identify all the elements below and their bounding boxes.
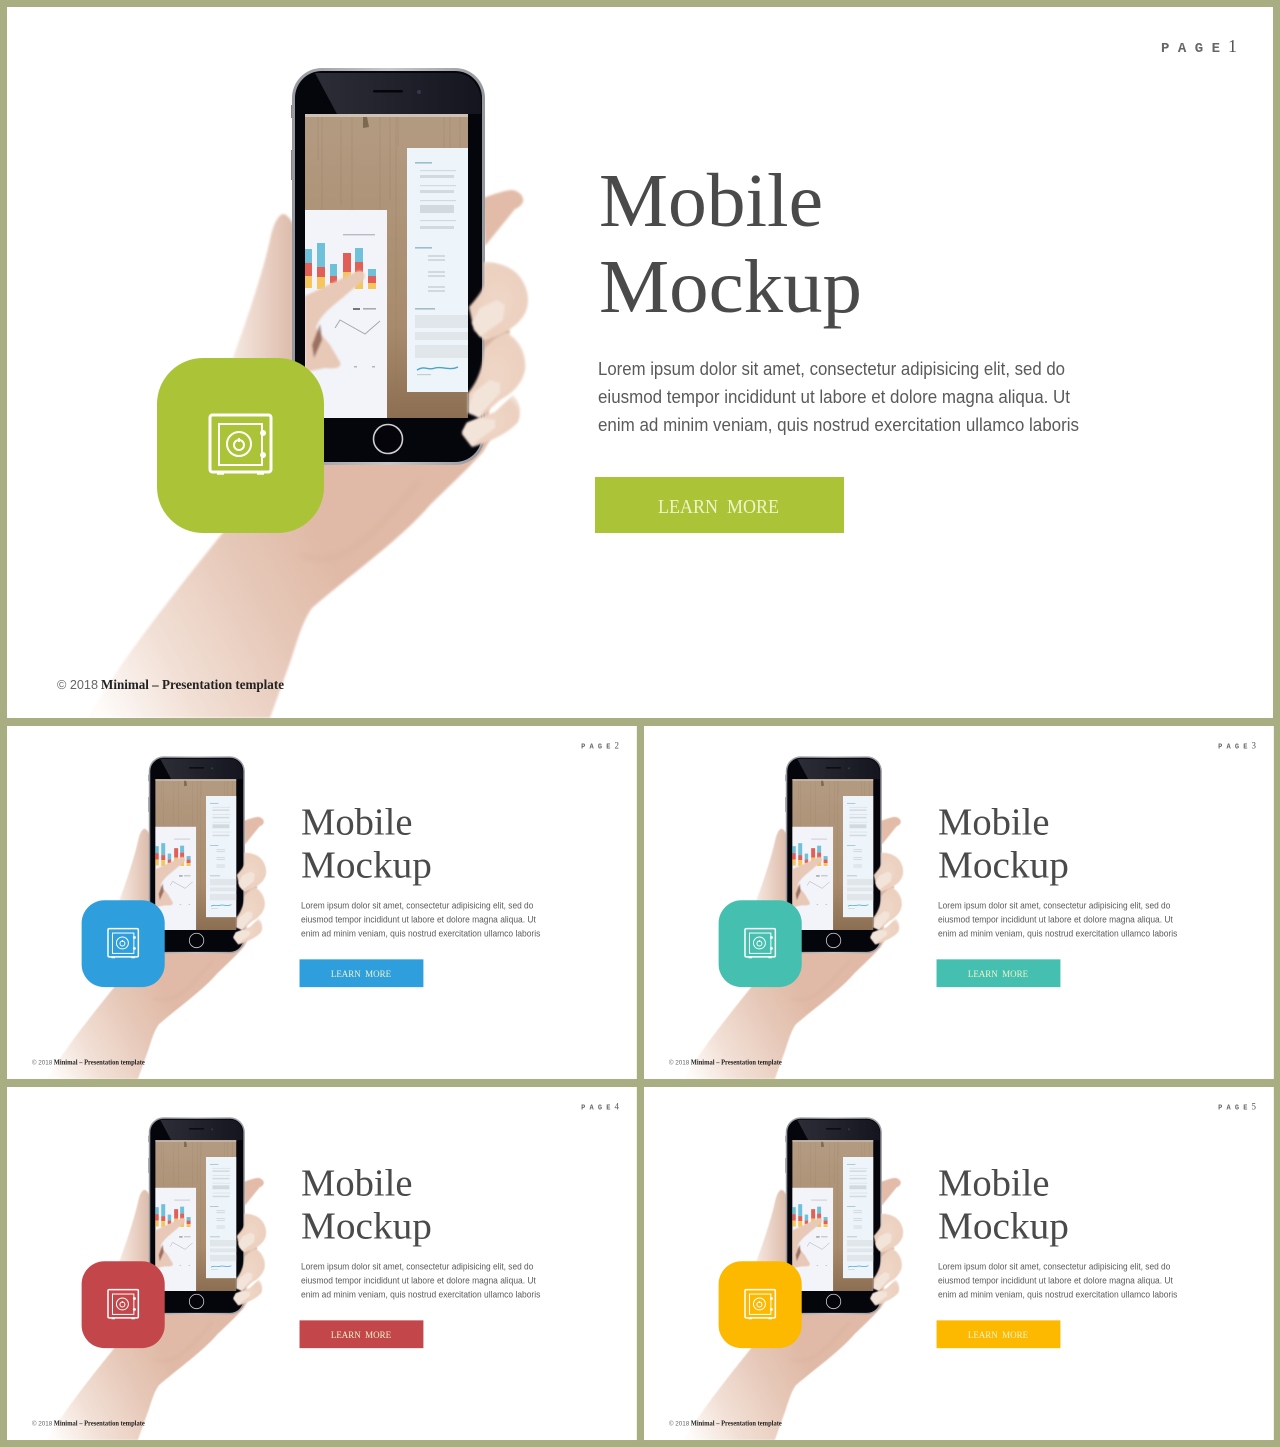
button: [937, 1320, 1060, 1348]
footer: Minimal – Presentation template: [54, 1059, 145, 1067]
footer: © 2018: [32, 1059, 53, 1067]
icon: safe: [108, 929, 138, 957]
speaker and camera: [373, 90, 421, 94]
heading: Mobile: [599, 159, 823, 243]
page number: PAGE: [581, 1104, 610, 1112]
page number: [1218, 740, 1256, 751]
heading: Mockup: [938, 1205, 1069, 1247]
button: [300, 1320, 423, 1348]
phone screen: [305, 114, 468, 418]
heading: Mockup: [301, 844, 432, 886]
paper: chart: [305, 210, 387, 418]
icon tile: teal: [719, 900, 802, 987]
heading: Mobile: [938, 802, 1049, 844]
body text: enim ad minim veniam, quis nostrud exercitation ullamco laboris: [598, 415, 1079, 435]
body text: enim ad minim veniam, quis nostrud exercitation ullamco laboris: [938, 1290, 1178, 1300]
footer: Minimal – Presentation template: [101, 678, 284, 693]
illustration: hand holding phone: [47, 1117, 266, 1440]
page number: 5: [1251, 1101, 1256, 1111]
footer: Minimal – Presentation template: [691, 1420, 782, 1428]
page number: 4: [614, 1101, 619, 1111]
heading: Mobile: [301, 802, 412, 844]
button: LEARN MORE: [658, 496, 779, 518]
page number: PAGE: [1218, 1104, 1247, 1112]
pointing finger on screen: [305, 271, 365, 372]
button: LEARN MORE: [331, 1330, 391, 1341]
footer: © 2018: [669, 1059, 690, 1067]
body text: eiusmod tempor incididunt ut labore et dolore magna aliqua. Ut: [938, 1276, 1173, 1286]
heading: [938, 802, 1069, 886]
body text: [301, 901, 541, 939]
finger nails: [462, 300, 505, 445]
panel: slide 1 (green): [7, 7, 1273, 718]
footer: © 2018: [669, 1420, 690, 1428]
body text: Lorem ipsum dolor sit amet, consectetur adipisicing elit, sed do: [301, 1262, 533, 1272]
footer: Minimal – Presentation template: [691, 1059, 782, 1067]
page number: [581, 740, 619, 751]
phone: [291, 68, 485, 465]
heading: [599, 159, 862, 329]
body text: eiusmod tempor incididunt ut labore et dolore magna aliqua. Ut: [598, 387, 1070, 407]
page number: 2: [614, 740, 619, 750]
heading: Mobile: [301, 1163, 412, 1205]
icon: safe: [745, 1290, 775, 1318]
heading: Mockup: [599, 245, 862, 329]
panel: slide 2 (blue): [7, 726, 637, 1079]
footer: © 2018: [57, 677, 98, 692]
body text: enim ad minim veniam, quis nostrud exercitation ullamco laboris: [301, 929, 541, 939]
panel: slide 4 (red): [7, 1087, 637, 1440]
button: [937, 959, 1060, 987]
body text: Lorem ipsum dolor sit amet, consectetur adipisicing elit, sed do: [301, 901, 533, 911]
fingers over phone: [462, 262, 528, 447]
body text: [598, 359, 1079, 435]
illustration: hand holding phone: [684, 756, 903, 1079]
paper: resume: [407, 148, 468, 392]
illustration: hand holding phone: [684, 1117, 903, 1440]
body text: Lorem ipsum dolor sit amet, consectetur adipisicing elit, sed do: [938, 1262, 1170, 1272]
page number: PAGE: [581, 743, 610, 751]
icon: safe: [745, 929, 775, 957]
body text: eiusmod tempor incididunt ut labore et dolore magna aliqua. Ut: [938, 915, 1173, 925]
hand and wrist: [88, 190, 523, 718]
button: LEARN MORE: [968, 1330, 1028, 1341]
body text: [938, 1262, 1178, 1300]
page number: PAGE: [1218, 743, 1247, 751]
heading: Mockup: [301, 1205, 432, 1247]
body text: enim ad minim veniam, quis nostrud exercitation ullamco laboris: [301, 1290, 541, 1300]
heading: Mobile: [938, 1163, 1049, 1205]
icon tile: green: [157, 358, 324, 533]
bar chart: [305, 243, 376, 289]
heading: [938, 1163, 1069, 1247]
body text: Lorem ipsum dolor sit amet, consectetur adipisicing elit, sed do: [938, 901, 1170, 911]
illustration: hand holding phone: [88, 68, 528, 718]
page number: 3: [1251, 740, 1256, 750]
button: LEARN MORE: [331, 969, 391, 980]
page number: [581, 1101, 619, 1112]
body text: eiusmod tempor incididunt ut labore et dolore magna aliqua. Ut: [301, 1276, 536, 1286]
body text: [301, 1262, 541, 1300]
body text: eiusmod tempor incididunt ut labore et dolore magna aliqua. Ut: [301, 915, 536, 925]
button: LEARN MORE: [968, 969, 1028, 980]
heading: [301, 802, 432, 886]
page number: 1: [1228, 36, 1237, 56]
icon tile: red: [82, 1261, 165, 1348]
footer: Minimal – Presentation template: [54, 1420, 145, 1428]
panel: slide 5 (yellow): [644, 1087, 1274, 1440]
page number: PAGE: [1161, 41, 1220, 57]
footer: © 2018: [32, 1420, 53, 1428]
panel: slide 3 (teal): [644, 726, 1274, 1079]
icon tile: yellow: [719, 1261, 802, 1348]
icon tile: blue: [82, 900, 165, 987]
heading: [301, 1163, 432, 1247]
button: [300, 959, 423, 987]
home button: [374, 424, 402, 454]
icon: safe: [108, 1290, 138, 1318]
page number: [1161, 36, 1237, 57]
page number: [1218, 1101, 1256, 1112]
heading: Mockup: [938, 844, 1069, 886]
body text: enim ad minim veniam, quis nostrud exercitation ullamco laboris: [938, 929, 1178, 939]
button: [595, 477, 844, 533]
illustration: hand holding phone: [47, 756, 266, 1079]
body text: Lorem ipsum dolor sit amet, consectetur adipisicing elit, sed do: [598, 359, 1065, 379]
icon: safe: [210, 415, 271, 473]
body text: [938, 901, 1178, 939]
